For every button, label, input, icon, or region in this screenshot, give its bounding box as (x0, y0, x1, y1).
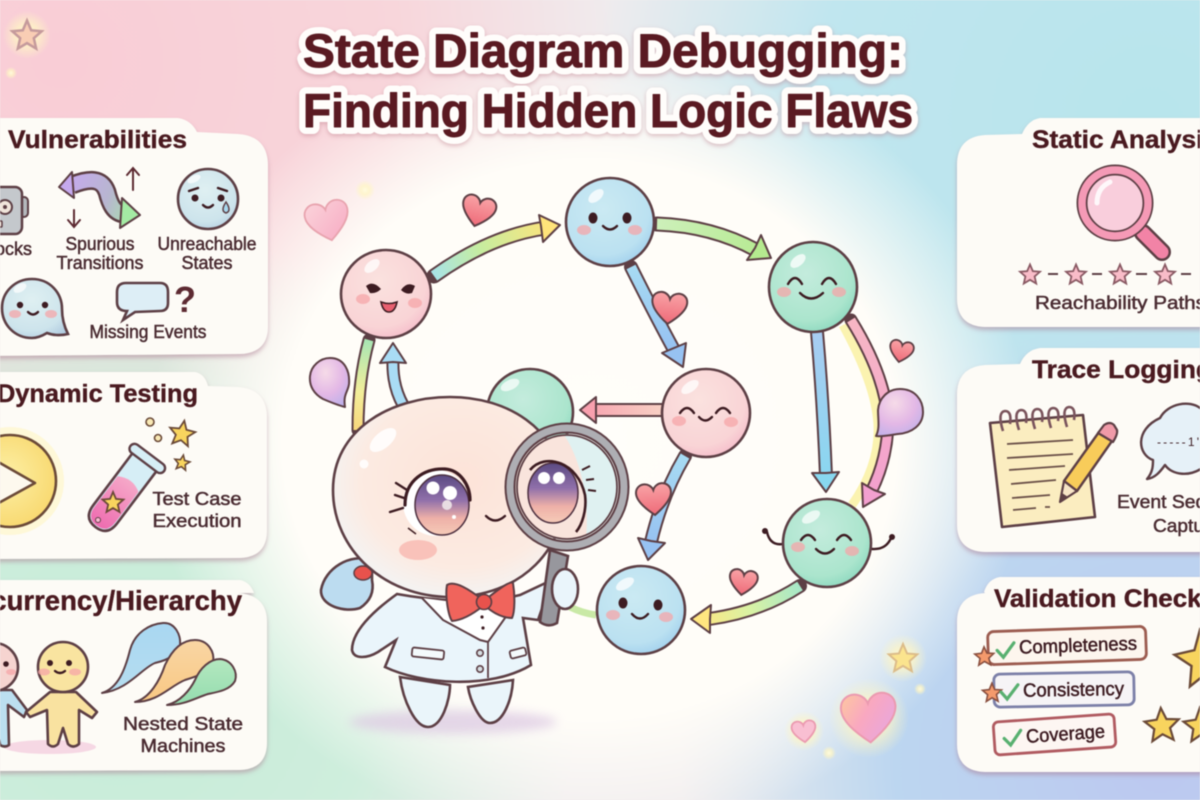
label: spurious transitions: Spurious (66, 234, 134, 254)
icon: small heart right (887, 339, 915, 364)
icon: big glowing heart (829, 678, 909, 758)
icon: reachability star path (1020, 264, 1191, 284)
icon: pencil (1060, 423, 1117, 502)
icon: deadlock robot (0, 187, 28, 234)
arrow: green straight down (812, 332, 839, 492)
icon: red heart top (458, 193, 498, 230)
arrow: rainbow outer loop (843, 320, 888, 507)
label: event sequence capture (1117, 492, 1200, 536)
title (303, 24, 913, 137)
title: State Diagram Debugging: (303, 24, 903, 77)
arrow: pink to blue (434, 215, 560, 276)
lab coat (352, 580, 552, 682)
icon: gold stars (1144, 626, 1200, 742)
icon: sparkle dots (822, 683, 926, 760)
icon: play button (0, 427, 64, 535)
label: unreachable states (158, 234, 256, 273)
arrow: stub to blue node (570, 607, 596, 615)
arrow: blue to lower pink (631, 267, 686, 367)
icon: red heart lower arrow (635, 483, 673, 516)
badge: completeness (974, 626, 1147, 665)
state node: lower pink (662, 369, 750, 457)
red bow tie (446, 583, 514, 621)
icon: soft heart top left (303, 198, 353, 245)
label: reachability paths: Reachability Paths (1035, 293, 1200, 313)
icon: spurious S arrow (59, 168, 140, 228)
title: State Diagram Debugging: (303, 24, 903, 77)
badge: consistency: Consistency (1023, 679, 1125, 702)
icon: red heart on blue arrow (650, 291, 688, 326)
icon: chat bubble face (2, 279, 68, 338)
arrow: green to blue (691, 586, 800, 633)
panel: vulnerabilities (0, 118, 268, 356)
panel: trace logging (957, 348, 1200, 552)
panel: validation checks (957, 577, 1200, 772)
icon: missing event bubble (117, 279, 196, 320)
icon: missing event bubble: ? (174, 279, 196, 320)
label: nested state machines (123, 714, 243, 756)
label: spurious transitions (56, 234, 144, 273)
state node: green happy (769, 242, 857, 332)
icon: pink magnifier (1082, 170, 1162, 252)
label: unreachable states: Unreachable (158, 234, 256, 254)
panel: static analysis (957, 118, 1200, 327)
icon: small glowing heart (784, 711, 824, 751)
icon: test tube with star (79, 418, 197, 540)
icon: purple balloon right (876, 389, 923, 436)
label: nested state machines: Nested State (123, 714, 243, 734)
arrow: lower pink to hidden green (580, 397, 662, 423)
icon: nested teardrop states (102, 623, 236, 705)
badge: coverage: Coverage (1025, 721, 1106, 748)
decorations: hearts, balloons, stars (303, 180, 927, 760)
label: missing events: Missing Events (90, 322, 206, 342)
magnifying glass (500, 428, 624, 625)
panel: concurrency and hierarchy (0, 580, 267, 771)
icon: sad unreachable face (178, 169, 238, 229)
title: Finding Hidden Logic Flaws (303, 84, 913, 137)
icon: event cloud (1141, 404, 1200, 479)
label: unreachable states: States (182, 253, 232, 273)
label: test case execution: Test Case (152, 489, 242, 509)
icon: pale star lower right (879, 634, 927, 682)
state node: pink mischievous (341, 250, 431, 338)
title: Finding Hidden Logic Flaws (303, 84, 913, 137)
state node: blue (566, 178, 654, 266)
arrow: lower pink to blue (638, 456, 685, 560)
label: test case execution: Execution (152, 511, 242, 531)
label: spurious transitions: Transitions (56, 253, 144, 273)
arrow: blue to green (657, 224, 771, 260)
mouth (486, 516, 505, 520)
shirt and lapels (422, 598, 505, 642)
icon: purple balloon left (310, 358, 349, 407)
panel: dynamic testing (0, 372, 267, 559)
badge: coverage (993, 714, 1116, 755)
heading: Vulnerabilities (8, 126, 187, 154)
label: nested state machines: Machines (140, 736, 226, 756)
state node: lower blue (597, 566, 685, 654)
left eye (403, 470, 469, 536)
blush (399, 540, 437, 560)
arrow: rainbow up left (358, 340, 369, 430)
icon: glow dot (355, 180, 375, 200)
head (333, 397, 565, 597)
state node: green behind detective (487, 369, 573, 455)
state diagram arrows (358, 215, 888, 633)
detective character with magnifier (321, 397, 624, 734)
icon: spiral notepad (990, 407, 1095, 527)
ponytail (321, 558, 373, 610)
state node: lower green with arms (762, 499, 895, 587)
heading: Trace Logging (1032, 356, 1200, 384)
icon: corner star top left (3, 11, 51, 79)
ground shadow (349, 710, 557, 734)
badge: consistency (982, 672, 1134, 707)
legs (400, 677, 513, 727)
icon: two holding figures (0, 642, 97, 754)
badge: completeness: Completeness (1019, 634, 1137, 659)
icon: event cloud: -----1' (1157, 435, 1199, 449)
arrow: blue up left (380, 343, 406, 405)
label: test case execution (152, 489, 242, 531)
heading: Dynamic Testing (0, 380, 198, 408)
icon: red heart near green (727, 568, 759, 597)
